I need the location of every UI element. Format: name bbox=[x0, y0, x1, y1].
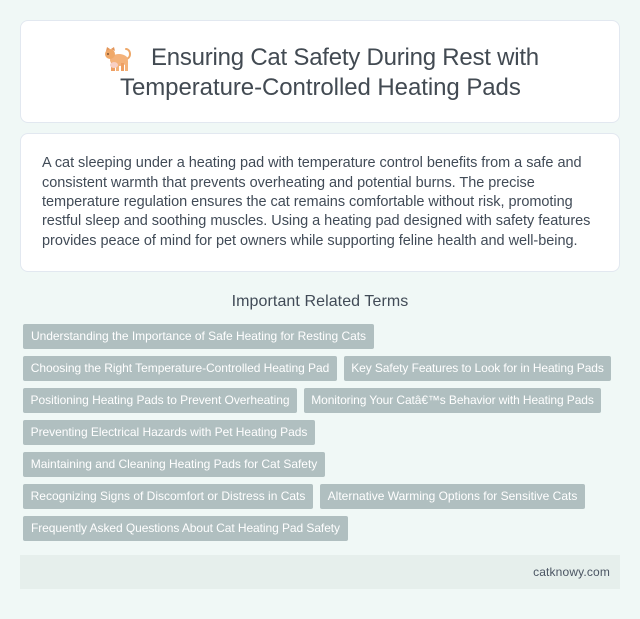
icon: cat bbox=[105, 47, 131, 71]
text: Choosing the Right Temperature-Controlled Heating Pad bbox=[31, 361, 329, 375]
description card: provides peace of mind for pet owners while supporting feline health and well-being. bbox=[42, 233, 578, 249]
text: Key Safety Features to Look for in Heating Pads bbox=[351, 361, 604, 375]
description card: temperature regulation ensures the cat remains comfortable without risk, promoting bbox=[42, 194, 573, 210]
title card bbox=[20, 20, 620, 123]
footer source text: catknowy.com bbox=[533, 565, 610, 579]
related terms tags bbox=[23, 324, 611, 541]
description card: A cat sleeping under a heating pad with temperature control benefits from a safe and bbox=[42, 155, 582, 171]
description card bbox=[20, 133, 620, 272]
title text bbox=[120, 44, 539, 101]
footer bbox=[20, 555, 620, 589]
text: Recognizing Signs of Discomfort or Distress in Cats bbox=[31, 489, 305, 503]
description card: restful sleep and soothing muscles. Using a heating pad designed with safety features bbox=[42, 213, 590, 229]
text: Positioning Heating Pads to Prevent Overheating bbox=[31, 393, 289, 407]
title card: Temperature-Controlled Heating Pads bbox=[120, 74, 521, 101]
title card: Ensuring Cat Safety During Rest with bbox=[151, 44, 539, 71]
text: Understanding the Importance of Safe Heating for Resting Cats bbox=[31, 329, 366, 343]
text: Alternative Warming Options for Sensitive Cats bbox=[328, 489, 577, 503]
description text bbox=[42, 155, 590, 249]
description card: consistent warmth that prevents overheating and potential burns. The precise bbox=[42, 175, 535, 191]
text: Monitoring Your Catâ€™s Behavior with Heating Pads bbox=[311, 393, 594, 407]
text: Maintaining and Cleaning Heating Pads for Cat Safety bbox=[31, 457, 317, 471]
text: Frequently Asked Questions About Cat Heating Pad Safety bbox=[31, 521, 340, 535]
text: Preventing Electrical Hazards with Pet Heating Pads bbox=[31, 425, 307, 439]
related terms heading: Important Related Terms bbox=[232, 293, 408, 310]
